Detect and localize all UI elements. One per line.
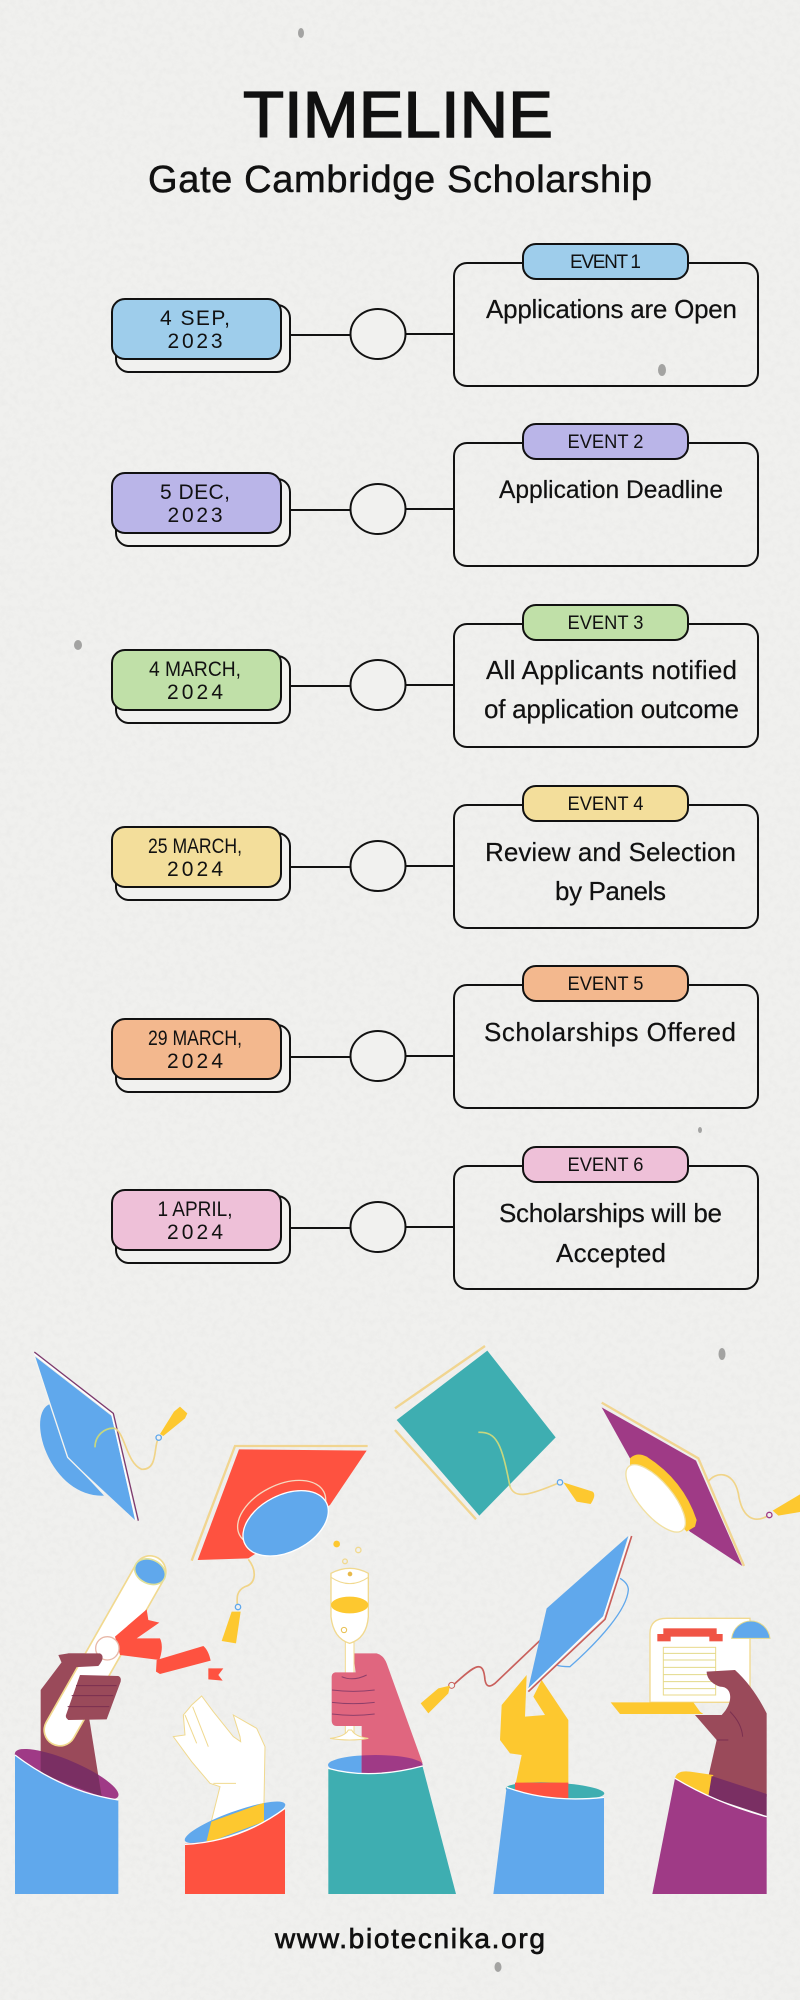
date tag 4: 25 MARCH, [148, 835, 242, 858]
event card 6 [454, 1147, 758, 1289]
timeline node 1 [350, 309, 406, 359]
hand holding diploma [10, 1554, 223, 1894]
timeline node 2 [350, 484, 406, 534]
date tag 1 [112, 299, 281, 359]
event card 6: Accepted [556, 1238, 666, 1268]
event card 1: EVENT 1 [570, 252, 641, 273]
event card 5: EVENT 5 [568, 974, 644, 995]
event card 5: Scholarships Offered [484, 1017, 736, 1047]
event card 4: by Panels [555, 876, 666, 906]
blue sleeve [493, 1780, 605, 1894]
event card 4 [454, 786, 758, 928]
ribbon [115, 1609, 223, 1681]
event card 3: EVENT 3 [568, 613, 644, 634]
event card 5 [454, 966, 758, 1108]
hand holding champagne glass [328, 1541, 456, 1894]
date tag 3 [112, 650, 281, 710]
date tag 5 [112, 1019, 281, 1079]
event row 3 [112, 605, 758, 747]
event card 6: Scholarships will be [499, 1198, 722, 1228]
date tag 2 [112, 473, 281, 533]
subtitle: Gate Cambridge Scholarship [148, 159, 652, 201]
icon: blue cap [34, 1352, 187, 1521]
event row 6 [112, 1147, 758, 1289]
blue cap in hand with string [421, 1536, 632, 1787]
date tag 6 [112, 1190, 281, 1250]
document on yellow tray [611, 1618, 770, 1714]
event row 1 [112, 244, 758, 386]
event card 6: EVENT 6 [568, 1155, 644, 1176]
event row 2 [112, 424, 758, 566]
open white hand [173, 1696, 289, 1894]
date tag 4: 2024 [167, 858, 223, 881]
date tag 6: 2024 [167, 1221, 223, 1244]
event row 4 [112, 786, 758, 928]
illustration: flying caps, left [34, 1352, 368, 1643]
website footer: www.biotecnika.org [274, 1923, 545, 1954]
date tag 6: 1 APRIL, [158, 1198, 232, 1221]
date tag 3: 4 MARCH, [149, 658, 241, 681]
icon: purple cap [602, 1403, 800, 1566]
event card 1 [454, 244, 758, 386]
date tag 2: 2023 [168, 504, 222, 527]
date tag 2: 5 DEC, [160, 481, 230, 504]
event card 3 [454, 605, 758, 747]
event row 5 [112, 966, 758, 1108]
title: TIMELINE [243, 78, 553, 151]
timeline node 4 [350, 841, 406, 891]
champagne glass [330, 1541, 368, 1740]
illustration: hands left (diploma and open hand) [10, 1541, 456, 1894]
event card 2: EVENT 2 [568, 432, 644, 453]
event card 2 [454, 424, 758, 566]
date tag 1: 4 SEP, [160, 307, 230, 330]
timeline node 3 [350, 660, 406, 710]
date tag 4 [112, 827, 281, 887]
event card 1: Applications are Open [486, 294, 737, 324]
diploma scroll [60, 1554, 170, 1730]
event card 4: Review and Selection [485, 837, 736, 867]
date tag 1: 2023 [168, 330, 222, 353]
illustration: hands right (cap in yellow hand, document) [421, 1536, 770, 1894]
illustration: flying caps, right [395, 1346, 800, 1566]
date tag 3: 2024 [167, 681, 223, 704]
event card 4: EVENT 4 [568, 794, 644, 815]
timeline node 6 [350, 1202, 406, 1252]
icon: teal cap [395, 1346, 594, 1519]
event card 3: All Applicants notified [486, 655, 737, 685]
date tag 5: 29 MARCH, [148, 1027, 242, 1050]
timeline node 5 [350, 1031, 406, 1081]
event card 3: of application outcome [484, 694, 739, 724]
event card 2: Application Deadline [499, 476, 723, 504]
icon: red cap [192, 1446, 368, 1643]
brown hand holding document [652, 1670, 767, 1894]
date tag 5: 2024 [167, 1050, 223, 1073]
